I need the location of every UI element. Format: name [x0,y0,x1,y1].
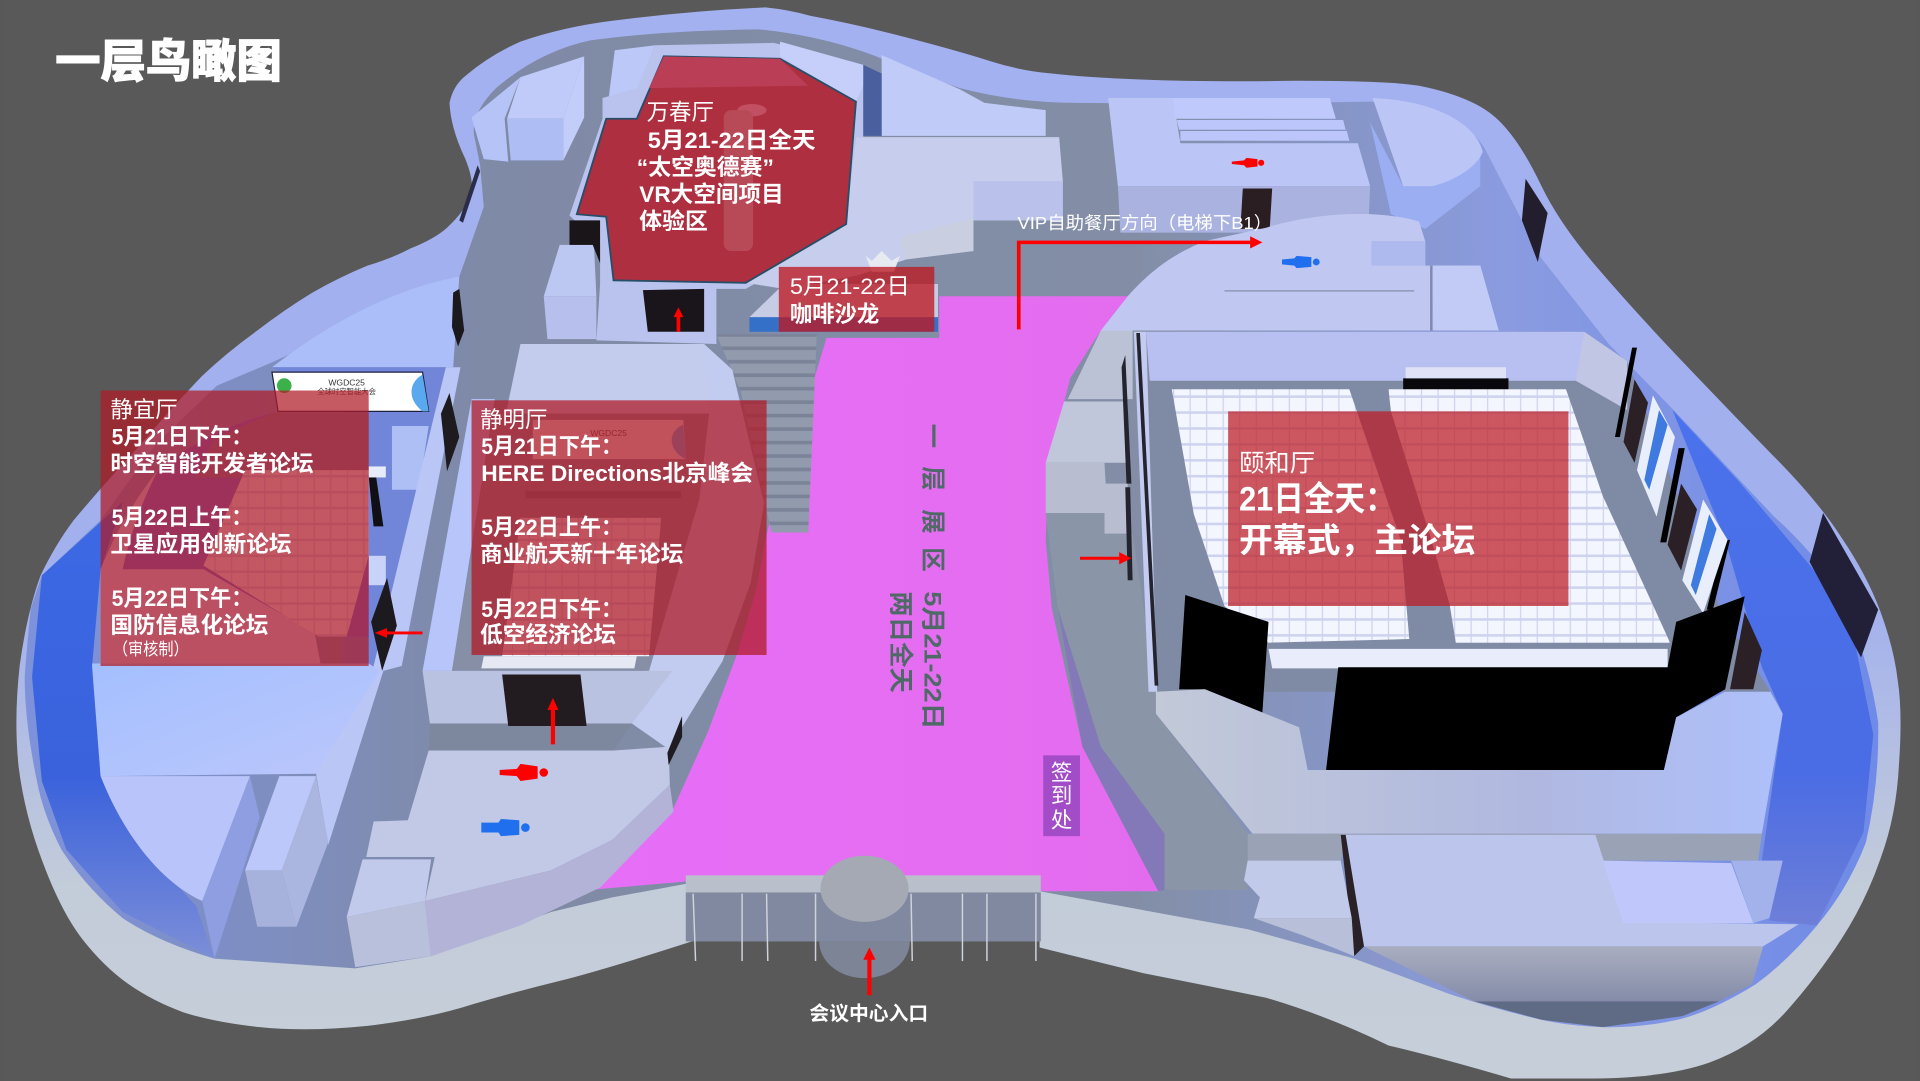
screen: Jingyi: 全球时空智能大会 [317,387,377,396]
Jingming screen [533,420,686,459]
front row seats [1269,649,1668,668]
arrow: into Jingyi [375,628,423,638]
top-left storage blocks [472,45,655,162]
panel: Jingming hall overlay [472,400,767,655]
VIP direction label: VIP自助餐厅方向（电梯下B1） [1018,213,1272,233]
text: Jingming hall: 低空经济论坛 [480,623,616,648]
text: Jingyi hall: 5月21日下午： [112,424,252,449]
icon: red restroom figure [500,764,548,781]
Jingming screen: WGDC25 [590,428,627,438]
arrow: VIP restaurant direction [1017,236,1262,329]
text: Jingyi hall: 5月22日上午： [112,505,252,530]
text: coffee salon: 5月21-22日 [790,274,910,299]
Jingming front row seats [481,656,637,668]
left trusses and doors [1122,333,1158,686]
text: Jingming hall: 5月22日下午： [481,597,622,622]
text: Jingyi hall: 静宜厅 [110,397,178,422]
Jingming seats [502,518,661,656]
panel: Wanchun hall red zone [577,56,856,283]
text: coffee salon: 咖啡沙龙 [790,302,880,327]
entrance label: 会议中心入口 [809,1003,928,1025]
lavender block below Jingyi [92,664,380,776]
text: Wanchun hall: 体验区 [639,208,708,234]
icon: blue restroom figure [481,819,530,836]
black stage side and main screens [1179,595,1745,770]
Wanchun interior detail [649,56,808,251]
hall: Yihe main floor [1134,332,1770,692]
lavender service floor [366,747,670,901]
walkway side wall [1058,608,1164,891]
text: Jingming hall [480,407,753,648]
upper right semicircular building [1101,214,1499,331]
seats left block [1172,389,1409,643]
blue courtyard left [32,502,214,959]
text: Jingming hall: 静明厅 [480,407,547,432]
Jingming front wall [423,671,672,724]
Jingyi seats [203,470,369,637]
vertical label: exhibition area: 层 [918,466,945,491]
registration label: 签 [1051,761,1072,785]
left wall door dark strip [459,165,480,223]
Coffee stand [749,251,938,332]
text: Jingming hall: HERE Directions北京峰会 [481,461,753,486]
Jingyi stage box [369,426,429,585]
title: 一层鸟瞰图 [55,36,282,87]
text: Jingyi hall [110,397,314,659]
vertical label: exhibition area: 展 [918,509,945,534]
text: Wanchun hall [637,100,816,234]
text: Jingming hall: 5月22日上午： [481,515,622,540]
Jingming room floor [452,414,709,671]
arrow: into Yihe [1080,552,1131,564]
text: Wanchun hall: VR大空间项目 [639,182,784,207]
text: Jingming hall: 5月21日下午： [481,434,622,459]
text: Yihe hall [1239,449,1475,560]
pink exhibition area [574,296,1158,891]
screen: Jingyi: WGDC25 [328,378,365,388]
Jingyi stage floor [196,413,369,477]
Jingming left wall [423,399,495,671]
small lower block [1244,861,1354,956]
arrow: entrance [863,948,876,995]
Jingming door [502,675,587,726]
registration label [1043,755,1080,836]
seats right block [1388,389,1670,643]
icon: red restroom figure upper [1232,158,1264,168]
upper-right wall door [1522,179,1548,262]
panel: coffee salon [779,267,934,332]
staircase [716,334,817,533]
back black table with seats [1403,367,1508,391]
top right service block [1108,98,1370,233]
text: Jingyi hall: （审核制） [113,639,189,659]
Jingyi lavender floor within panel [101,413,321,666]
hall: Wanchun surrounding walls [569,42,1063,344]
registration label: 处 [1051,809,1072,833]
curved front wall [425,785,674,956]
entrance canopy and glass [686,856,1041,978]
front box [347,859,431,967]
lower-left large block [101,776,260,959]
vertical label: exhibition area: 区 [918,547,945,572]
vertical label: exhibition area [918,424,945,572]
panel: Yihe hall overlay [1228,411,1568,606]
text: Jingyi hall: 国防信息化论坛 [110,612,269,638]
text: Wanchun hall: 万春厅 [647,100,714,125]
lower gray strip [1248,834,1762,861]
text: Jingming hall: 商业航天新十年论坛 [480,542,684,567]
gray walkway [1046,513,1248,890]
stage front floor [1156,689,1783,834]
door Jingyi right wall upper [441,393,459,471]
screen: Jingyi [272,372,429,411]
text: Jingyi hall: 时空智能开发者论坛 [110,451,314,476]
Jingyi room side wall [316,367,461,845]
half-round block [1370,98,1483,229]
registration label: 到 [1051,784,1072,808]
Jingyi room floor right of panel [272,367,446,666]
icon: blue restroom figure upper [1282,256,1320,268]
vertical label: dates [887,591,945,730]
side door near pink [667,716,682,765]
right-wall door [1810,513,1878,657]
arrow: into Jingming [547,698,558,744]
text: Jingyi hall: 5月22日下午： [112,586,252,611]
text: Wanchun hall: “太空奥德赛” [637,154,774,180]
door right of stage [1730,612,1762,689]
top right door [1240,189,1272,229]
text: Wanchun hall: 5月21-22日全天 [648,128,816,153]
text: Yihe hall: 颐和厅 [1239,449,1315,477]
panel: Jingyi hall overlay [101,391,369,666]
door left upper [452,289,464,346]
blue courtyard right [1673,410,1873,926]
lower-left narrow block [245,776,328,927]
step floor [429,724,632,750]
Wanchun door [643,289,704,332]
text: Yihe hall: 21日全天： [1239,481,1396,519]
lower right blocks [1341,835,1799,1027]
vertical label: dates: 两日全天 [887,591,915,693]
text: coffee salon [790,274,910,327]
dark door left of Wanchun [569,220,600,263]
Jingming hall roof [506,344,743,414]
vertical label: dates: 5月21-22日 [918,591,945,730]
arrow: into Wanchun [674,307,683,332]
blocks right of pink [1046,331,1133,534]
left room roof [272,277,459,367]
mid block beside Wanchun [544,245,596,339]
vertical label: exhibition area: 一 [918,424,945,448]
right trusses and doors [1615,348,1730,613]
Jingming curved side [632,344,764,749]
Jingyi room interior [123,413,369,637]
text: Yihe hall: 开幕式，主论坛 [1239,522,1475,560]
text: Jingyi hall: 卫星应用创新论坛 [110,531,292,557]
door on Jingyi right wall [371,578,397,671]
Jingming stage edge [525,491,681,498]
